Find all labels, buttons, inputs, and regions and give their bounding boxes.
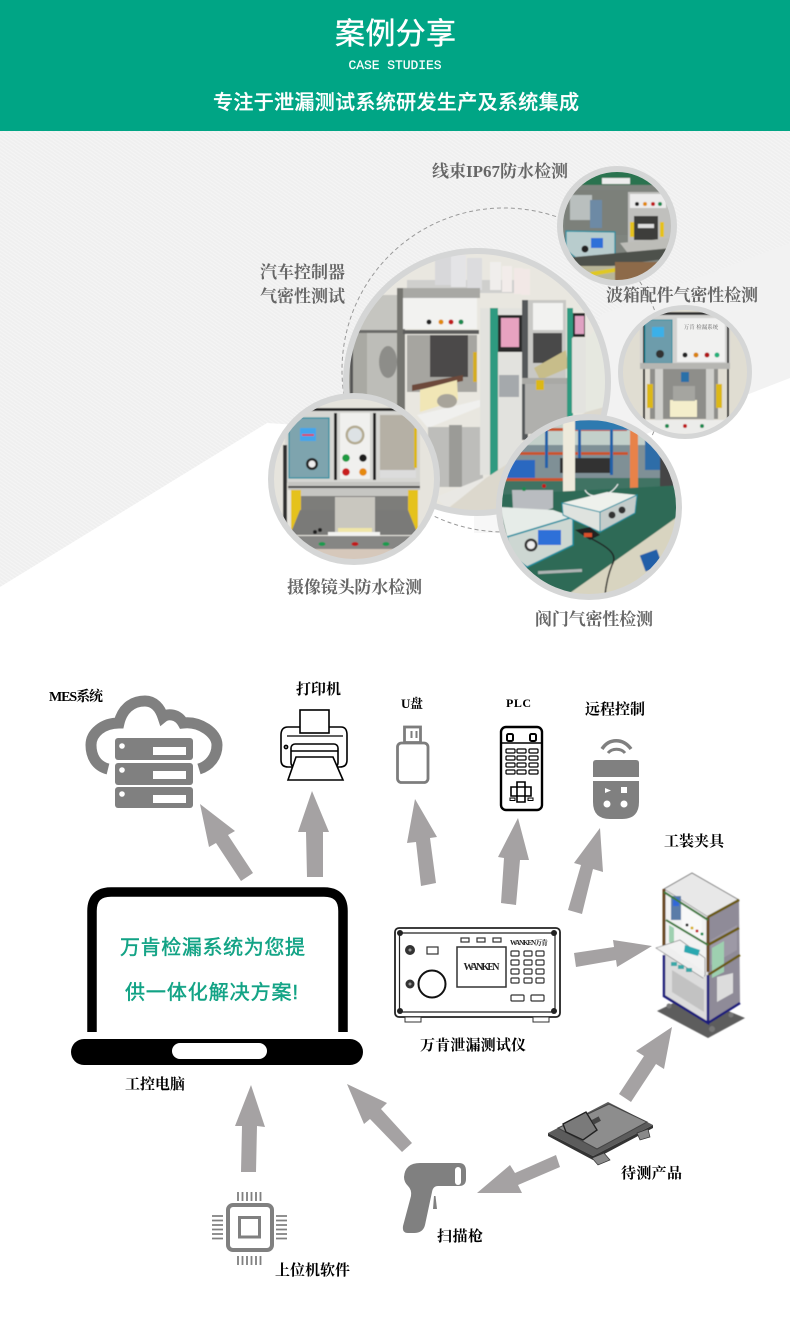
label: industrial PC: 工控电脑	[125, 1075, 185, 1093]
icon: printer	[281, 710, 347, 780]
label: gearbox fitting: 波箱配件气密性检测	[606, 285, 758, 305]
label: camera waterproof: 摄像镜头防水检测	[287, 577, 422, 597]
arrow: laptop to MES	[200, 804, 253, 881]
photo: gearbox fitting test	[618, 305, 755, 440]
label: USB: U盘	[401, 696, 423, 711]
laptop	[71, 892, 363, 1065]
icon: USB drive	[398, 727, 428, 782]
small panel text: 万肯 检漏系统	[684, 323, 719, 331]
icon: chip software	[212, 1192, 287, 1265]
laptop screen text line 1: 万肯检漏系统为您提	[120, 936, 305, 959]
arrow: tester to remote control	[568, 828, 603, 914]
icon: PLC remote	[501, 727, 542, 810]
icon: product under test	[548, 1102, 653, 1165]
tagline: 专注于泄漏测试系统研发生产及系统集成	[213, 91, 579, 114]
arrow: tester to fixture	[574, 940, 652, 967]
label: wire harness: 线束IP67防水检测	[432, 161, 568, 181]
arrow: chip to laptop	[235, 1085, 265, 1172]
label: automotive controller line 1: 汽车控制器	[260, 262, 345, 282]
leak tester device	[395, 928, 560, 1022]
fixture machine	[656, 873, 745, 1038]
icon: barcode scanner	[403, 1163, 466, 1233]
header banner	[0, 0, 790, 131]
arrow: product to fixture	[619, 1027, 672, 1102]
label: product under test: 待测产品	[621, 1164, 682, 1182]
textured background panel	[0, 131, 790, 640]
photo: valve air tightness test	[495, 414, 690, 610]
screen logo text: WANKEN	[464, 962, 500, 973]
arrow: laptop to printer	[298, 791, 329, 877]
photo: wire harness IP67	[555, 165, 680, 290]
label: leak tester: 万肯泄漏测试仪	[420, 1036, 526, 1054]
label: valve air tightness: 阀门气密性检测	[535, 609, 653, 629]
photo: automotive controller test machines	[340, 245, 615, 520]
label: MES system: MES系统	[49, 688, 104, 705]
label: fixture: 工装夹具	[664, 832, 726, 850]
subtitle english: CASE STUDIES	[348, 58, 442, 73]
arrow: tester to PLC	[498, 818, 529, 905]
label: host software: 上位机软件	[275, 1261, 350, 1279]
label: automotive controller line 2: 气密性测试	[260, 286, 345, 306]
label: scanner: 扫描枪	[437, 1227, 483, 1245]
photo: camera waterproof test	[268, 392, 443, 567]
laptop screen text line 2: 供一体化解决方案!	[125, 981, 298, 1004]
dashed orbit circle	[342, 208, 666, 532]
icon: cloud servers	[91, 701, 217, 808]
icon: remote control	[593, 741, 639, 819]
label: PLC: PLC	[506, 696, 531, 710]
label: remote control: 远程控制	[585, 700, 645, 718]
label: printer: 打印机	[296, 680, 341, 698]
arrow: scanner to laptop	[347, 1084, 412, 1152]
arrow: tester to USB	[407, 799, 437, 886]
title: 案例分享	[335, 18, 456, 51]
arrow: product to scanner	[477, 1155, 560, 1193]
device brand text: WANKEN万肯	[510, 938, 548, 947]
